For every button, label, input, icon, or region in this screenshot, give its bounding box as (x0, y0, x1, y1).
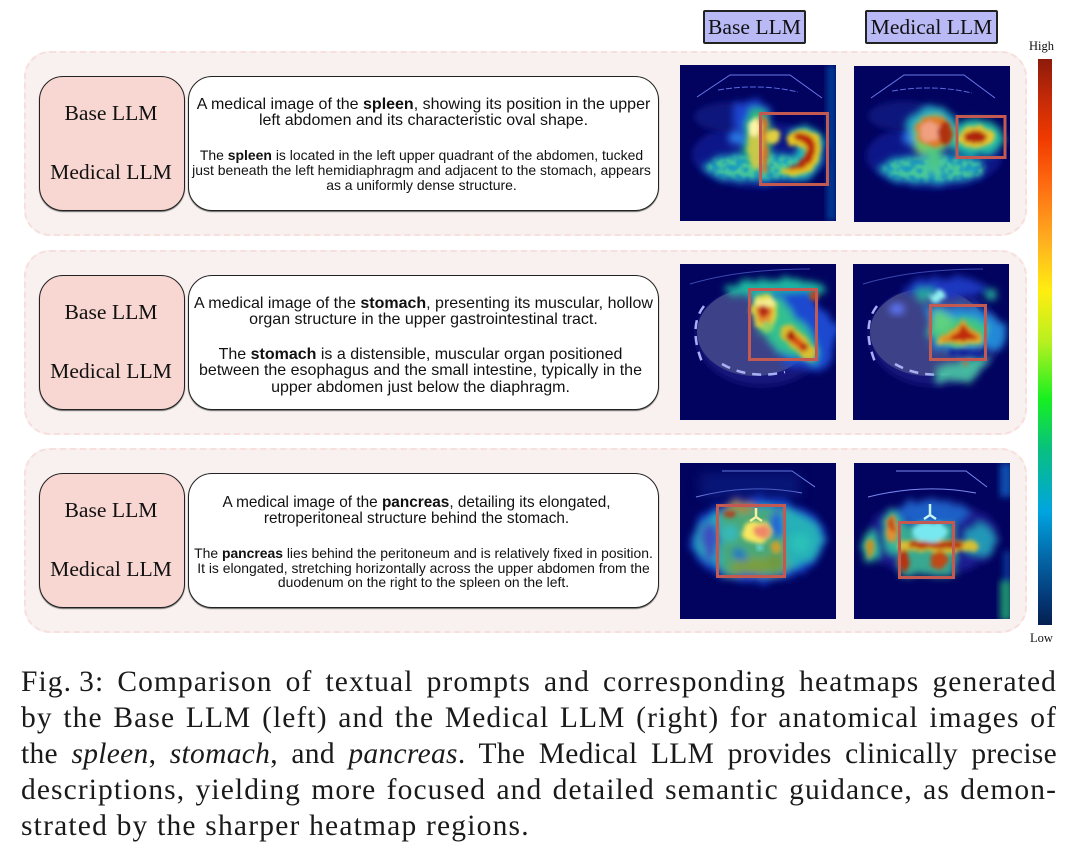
caption: Fig. 3: Comparison of textual prompts and corresponding heatmaps generated (21, 666, 1057, 698)
model labels: stomach (39, 275, 185, 410)
base prompt: stomach (194, 295, 653, 328)
panel: spleen (24, 51, 1027, 236)
model labels: spleen: Base LLM (65, 101, 157, 125)
model labels: pancreas: Base LLM (65, 498, 157, 522)
model labels: stomach: Medical LLM (50, 359, 172, 383)
caption: by the Base LLM (left) and the Medical LLM (right) for anatomical images of (21, 702, 1057, 734)
base prompt: pancreas (222, 494, 611, 527)
panel: stomach (24, 250, 1027, 435)
colorbar label: low: Low (1030, 631, 1053, 645)
medical prompt: spleen (192, 147, 651, 193)
heatmap: pancreas medical (854, 463, 1010, 619)
model labels: spleen: Medical LLM (50, 160, 172, 184)
base prompt: stomach: A medical image of the stomach, presenting its muscular, hollow (194, 295, 653, 312)
base prompt: pancreas: A medical image of the pancreas, detailing its elongated, (222, 494, 611, 511)
base prompt: spleen: A medical image of the spleen, showing its position in the upper (197, 96, 650, 113)
model labels: stomach: Base LLM (65, 300, 157, 324)
caption (21, 666, 1057, 842)
medical prompt: spleen: The spleen is located in the left upper quadrant of the abdomen, tucked (200, 147, 643, 163)
header: Medical LLM (865, 10, 998, 44)
header: Medical LLM: Medical LLM (871, 15, 992, 39)
caption: strated by the sharper heatmap regions. (21, 810, 530, 842)
medical prompt: pancreas: The pancreas lies behind the peritoneum and is relatively fixed in position. (194, 545, 653, 561)
medical prompt: pancreas (194, 545, 653, 590)
medical prompt: stomach: between the esophagus and the small intestine, typically in the (199, 362, 642, 379)
base prompt: spleen: left abdomen and its characteristic oval shape. (259, 112, 588, 129)
prompts: spleen (188, 76, 659, 211)
medical prompt: stomach (199, 346, 642, 396)
caption: descriptions, yielding more focused and detailed semantic guidance, as demon- (21, 774, 1057, 806)
base prompt: stomach: organ structure in the upper gastrointestinal tract. (249, 311, 598, 328)
header: Base LLM (703, 10, 806, 44)
header: Base LLM: Base LLM (708, 15, 801, 39)
model labels: pancreas: Medical LLM (50, 557, 172, 581)
prompts: pancreas (188, 473, 659, 608)
medical prompt: spleen: as a uniformly dense structure. (326, 177, 517, 193)
medical prompt: pancreas: It is elongated, stretching horizontally across the upper abdomen from the (197, 560, 650, 576)
heatmap: stomach base (680, 264, 836, 420)
colorbar label: high: High (1029, 39, 1054, 53)
prompts: stomach (188, 275, 659, 410)
medical prompt: stomach: upper abdomen just below the diaphragm. (271, 379, 570, 396)
caption: the spleen, stomach, and pancreas. The Medical LLM provides clinically precise (21, 738, 1057, 770)
base prompt: pancreas: retroperitoneal structure behind the stomach. (264, 510, 569, 527)
base prompt: spleen (196, 96, 650, 129)
medical prompt: stomach: The stomach is a distensible, muscular organ positioned (219, 346, 622, 363)
heatmap: pancreas base (680, 463, 836, 619)
model labels: spleen (39, 76, 185, 211)
panel: pancreas (24, 448, 1027, 633)
heatmap: spleen base (680, 65, 836, 221)
colorbar (1038, 59, 1052, 625)
heatmap: stomach medical (853, 264, 1009, 420)
model labels: pancreas (39, 473, 185, 608)
medical prompt: spleen: just beneath the left hemidiaphragm and adjacent to the stomach, appears (192, 162, 651, 178)
heatmap: spleen medical (854, 66, 1010, 222)
medical prompt: pancreas: duodenum on the right to the spleen on the left. (278, 574, 569, 590)
